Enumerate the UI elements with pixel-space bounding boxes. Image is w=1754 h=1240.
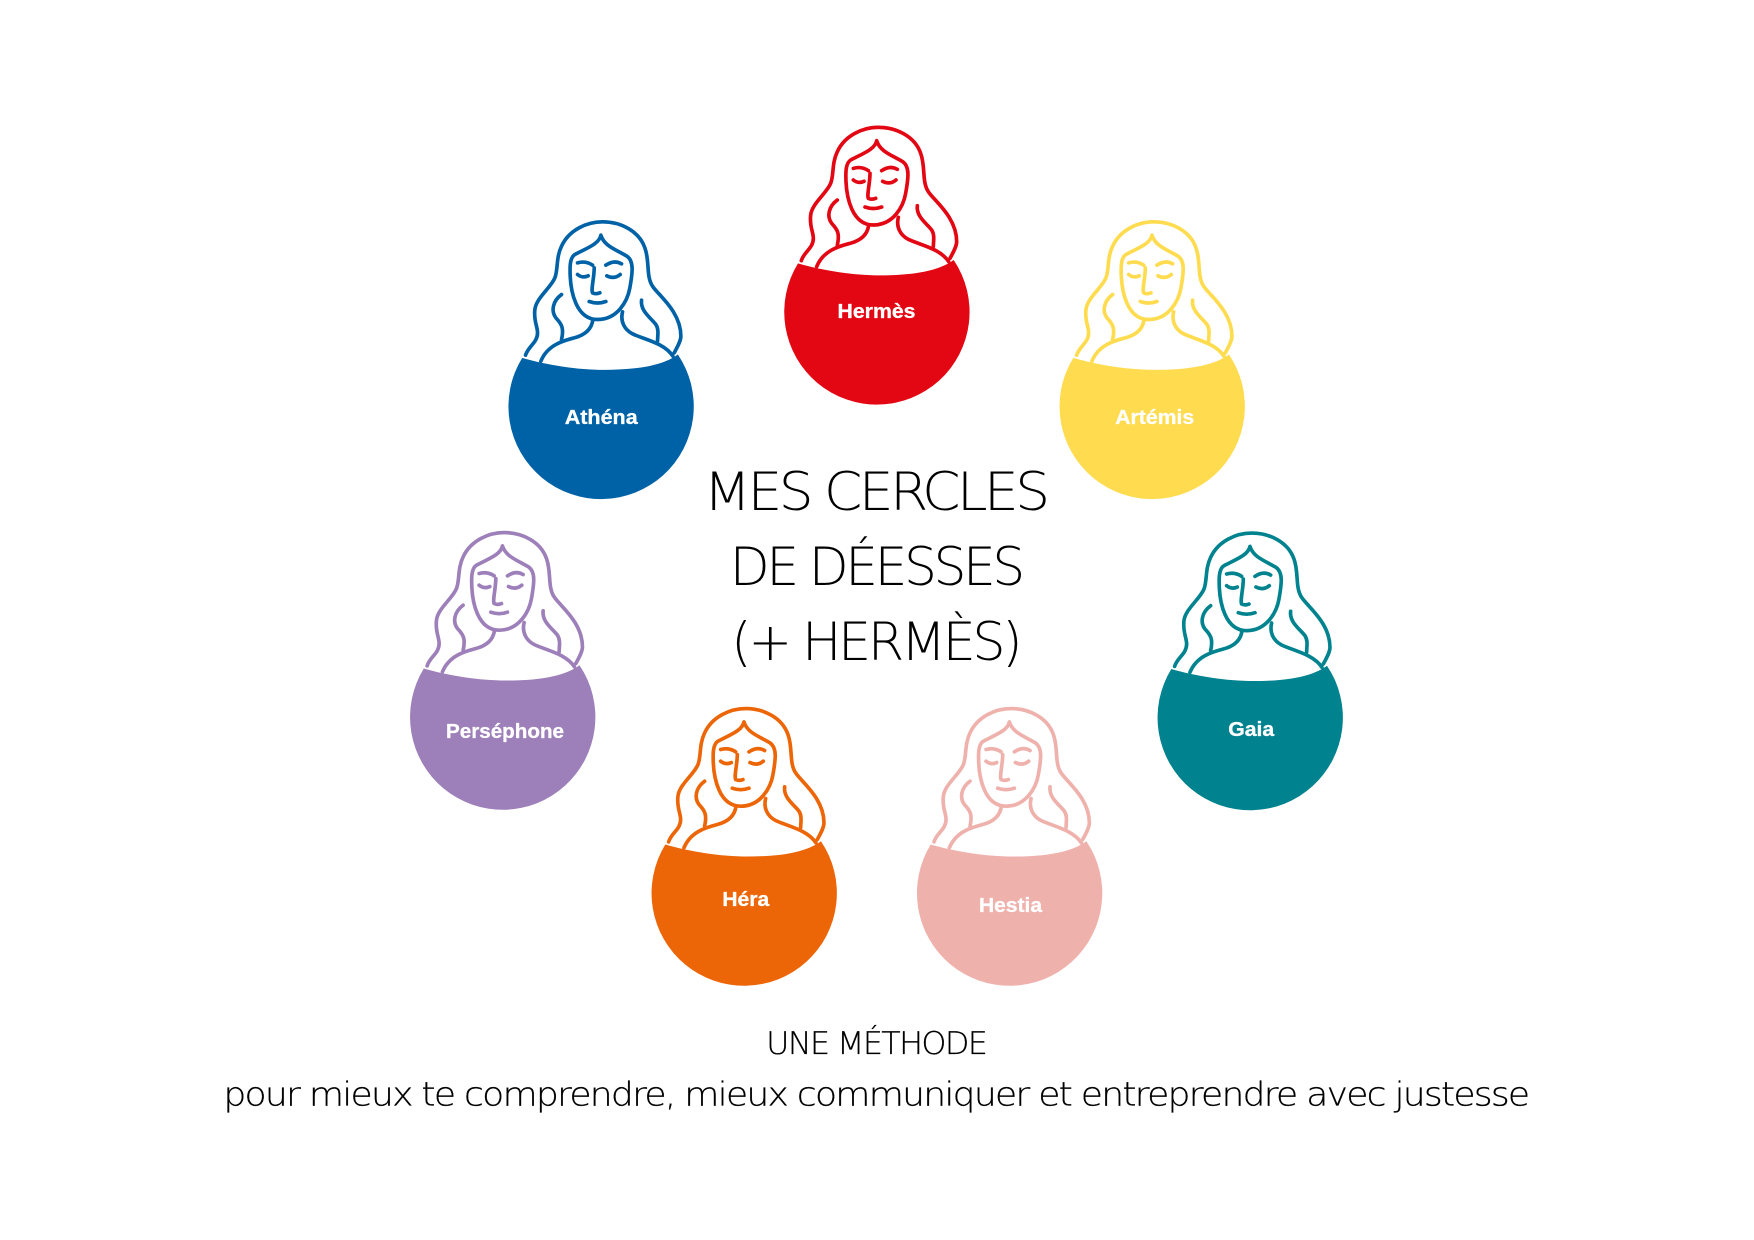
title: (+ HERMÈS) bbox=[731, 610, 1019, 673]
figure: Héra bbox=[652, 709, 837, 986]
label: Gaia: Gaia bbox=[1228, 719, 1275, 741]
label: Hermès: Hermès bbox=[838, 301, 916, 323]
subtitle: une méthode: UNE MÉTHODE bbox=[766, 1024, 986, 1062]
label: Héra: Héra bbox=[722, 889, 770, 911]
figure: Artémis bbox=[1060, 222, 1245, 499]
label: Artémis: Artémis bbox=[1115, 407, 1194, 429]
figure: Hestia bbox=[917, 709, 1102, 986]
tagline: pour mieux te comprendre, mieux communiquer et entreprendre avec justesse bbox=[223, 1075, 1528, 1114]
figure: Gaia bbox=[1158, 533, 1343, 810]
label: Athéna: Athéna bbox=[565, 407, 639, 429]
figure: Hermès bbox=[784, 127, 970, 405]
figure: Perséphone bbox=[410, 533, 595, 810]
figure: Athéna bbox=[508, 222, 694, 499]
label: Hestia: Hestia bbox=[979, 895, 1043, 917]
label: Perséphone: Perséphone bbox=[446, 721, 564, 743]
title bbox=[704, 462, 1047, 673]
title: DE DÉESSES bbox=[730, 535, 1022, 598]
title: MES CERCLES bbox=[704, 462, 1047, 523]
